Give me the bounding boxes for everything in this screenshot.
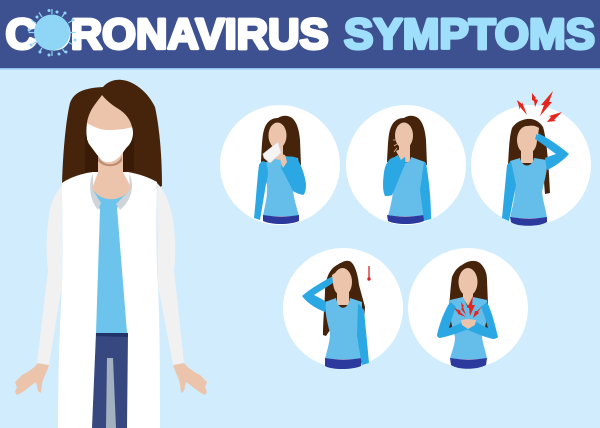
hands bbox=[15, 363, 207, 395]
header banner bbox=[0, 0, 600, 70]
panel: coughing bbox=[346, 105, 466, 225]
neck bbox=[92, 150, 131, 199]
hair bbox=[62, 80, 162, 200]
pants bbox=[450, 358, 487, 369]
face bbox=[87, 95, 132, 140]
arm right bbox=[466, 302, 498, 339]
pants bbox=[387, 215, 424, 224]
doctor figure bbox=[15, 80, 207, 428]
hand bbox=[396, 148, 406, 160]
panel: sneezing bbox=[220, 105, 340, 225]
shirt bbox=[92, 188, 131, 333]
hand bbox=[278, 153, 287, 168]
hands bbox=[461, 319, 476, 329]
pants bbox=[325, 358, 362, 369]
sleeves bbox=[37, 183, 184, 365]
hand bbox=[332, 271, 339, 283]
torso bbox=[510, 158, 547, 218]
neck bbox=[337, 290, 349, 305]
collar bbox=[90, 174, 132, 210]
icon: virus bbox=[28, 9, 76, 56]
face bbox=[517, 126, 537, 154]
mask bbox=[86, 123, 133, 162]
torso bbox=[263, 156, 299, 216]
hand bbox=[524, 126, 539, 135]
title: coronavirus: CORONAVIRUS bbox=[6, 12, 328, 58]
pants bbox=[92, 333, 128, 428]
torso bbox=[450, 297, 488, 359]
cough marks bbox=[393, 140, 397, 152]
face bbox=[268, 122, 286, 148]
tissue bbox=[263, 142, 281, 163]
pain bolts bbox=[454, 296, 482, 318]
neck bbox=[399, 142, 410, 162]
face bbox=[333, 268, 352, 296]
arm right bbox=[420, 162, 431, 221]
hair bbox=[323, 261, 365, 336]
neck bbox=[463, 290, 473, 306]
hair bbox=[261, 116, 301, 165]
arm left bbox=[437, 302, 471, 338]
torso bbox=[325, 298, 362, 359]
hair bbox=[387, 116, 427, 165]
arm raised bbox=[281, 156, 306, 195]
face bbox=[395, 122, 413, 148]
coat bbox=[58, 172, 160, 428]
neck bbox=[521, 148, 533, 163]
pants bbox=[510, 217, 547, 226]
arm raised bbox=[535, 133, 569, 170]
pants bbox=[263, 215, 299, 224]
icon: thermometer bbox=[367, 266, 371, 281]
panel: headache bbox=[471, 91, 591, 226]
neck bbox=[272, 142, 283, 160]
arm raised bbox=[302, 276, 333, 312]
panel: chest pain bbox=[408, 248, 528, 369]
arm raised bbox=[383, 156, 405, 196]
pain bolts bbox=[517, 91, 562, 122]
arm left bbox=[502, 161, 516, 221]
face bbox=[458, 268, 478, 296]
arm left bbox=[254, 161, 268, 220]
hair bbox=[448, 261, 489, 330]
arm right bbox=[357, 303, 369, 365]
panel: fever bbox=[283, 248, 403, 369]
title: symptoms: SYMPTOMS bbox=[344, 12, 595, 58]
hair bbox=[508, 119, 550, 194]
torso bbox=[388, 155, 427, 216]
